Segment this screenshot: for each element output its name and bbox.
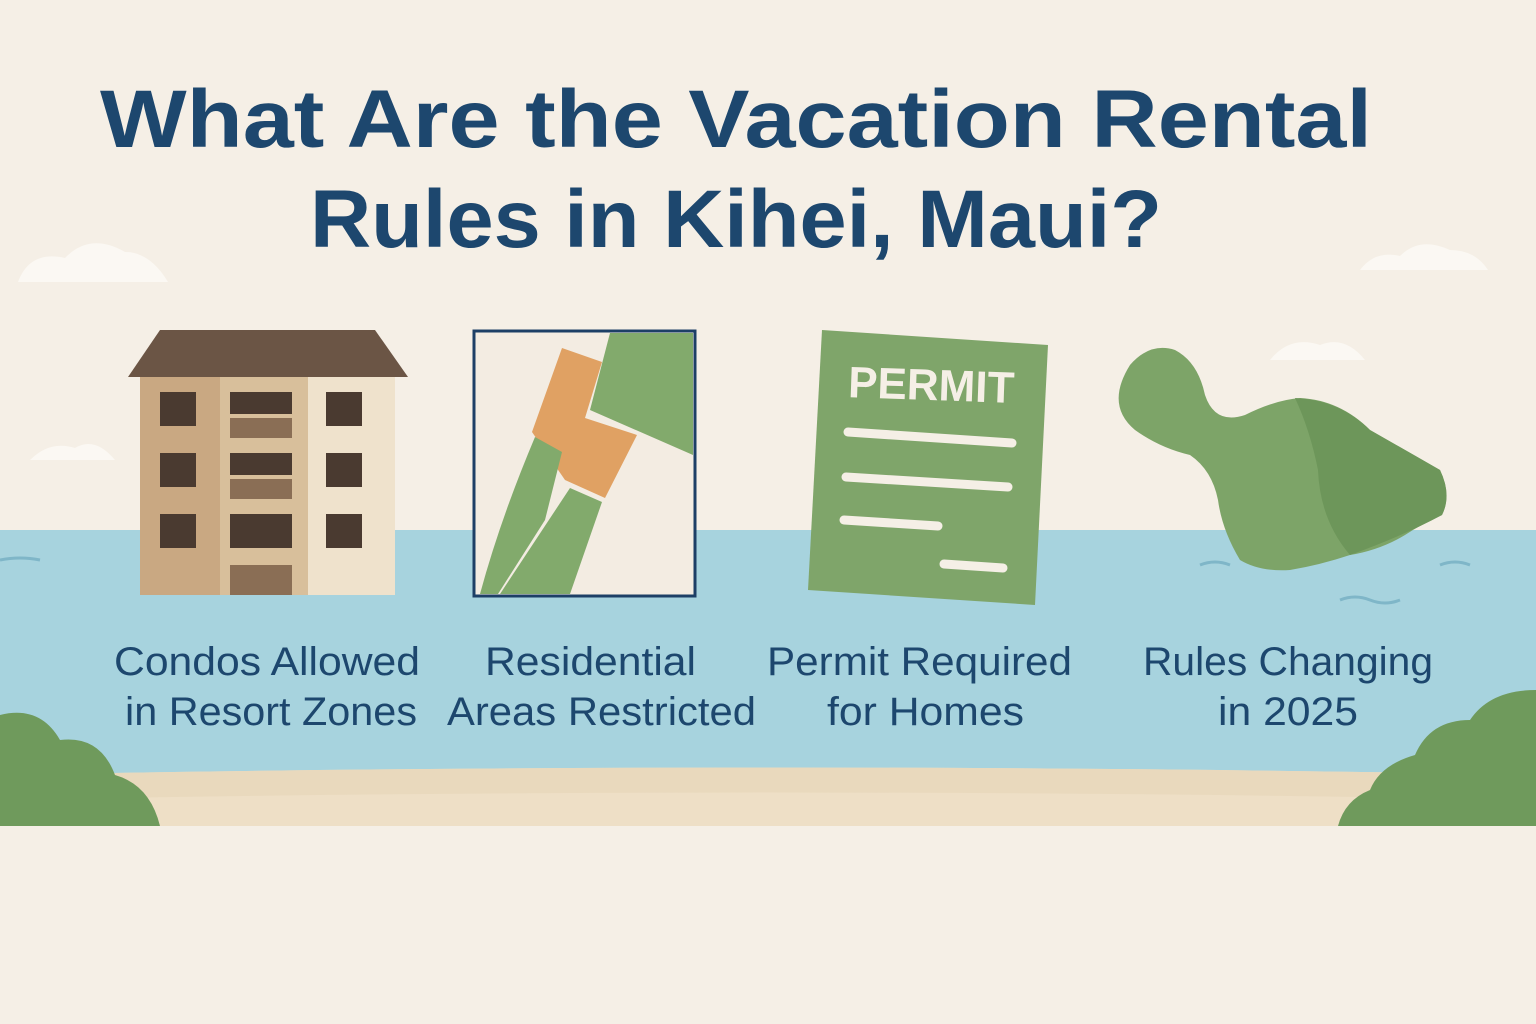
labels: Permit Required bbox=[767, 640, 1072, 684]
labels bbox=[114, 640, 1433, 734]
labels: in 2025 bbox=[1218, 690, 1358, 734]
labels: Rules Changing bbox=[1143, 640, 1433, 684]
icon: permit document: PERMIT bbox=[847, 358, 1015, 413]
icon: condo building bbox=[128, 330, 408, 595]
title: Rules in Kihei, Maui? bbox=[310, 174, 1162, 265]
clouds bbox=[18, 243, 1488, 460]
labels: Residential bbox=[485, 640, 696, 684]
labels: Areas Restricted bbox=[447, 690, 756, 734]
icon: Maui island bbox=[0, 348, 1470, 603]
labels: Condos Allowed bbox=[114, 640, 420, 684]
title bbox=[100, 74, 1372, 265]
icon: permit document bbox=[808, 330, 1048, 605]
bushes bbox=[0, 690, 1536, 826]
icon: zoning map bbox=[474, 331, 695, 596]
labels: for Homes bbox=[827, 690, 1024, 734]
labels: in Resort Zones bbox=[125, 690, 417, 734]
water bbox=[0, 530, 1536, 826]
title: What Are the Vacation Rental bbox=[100, 74, 1372, 165]
